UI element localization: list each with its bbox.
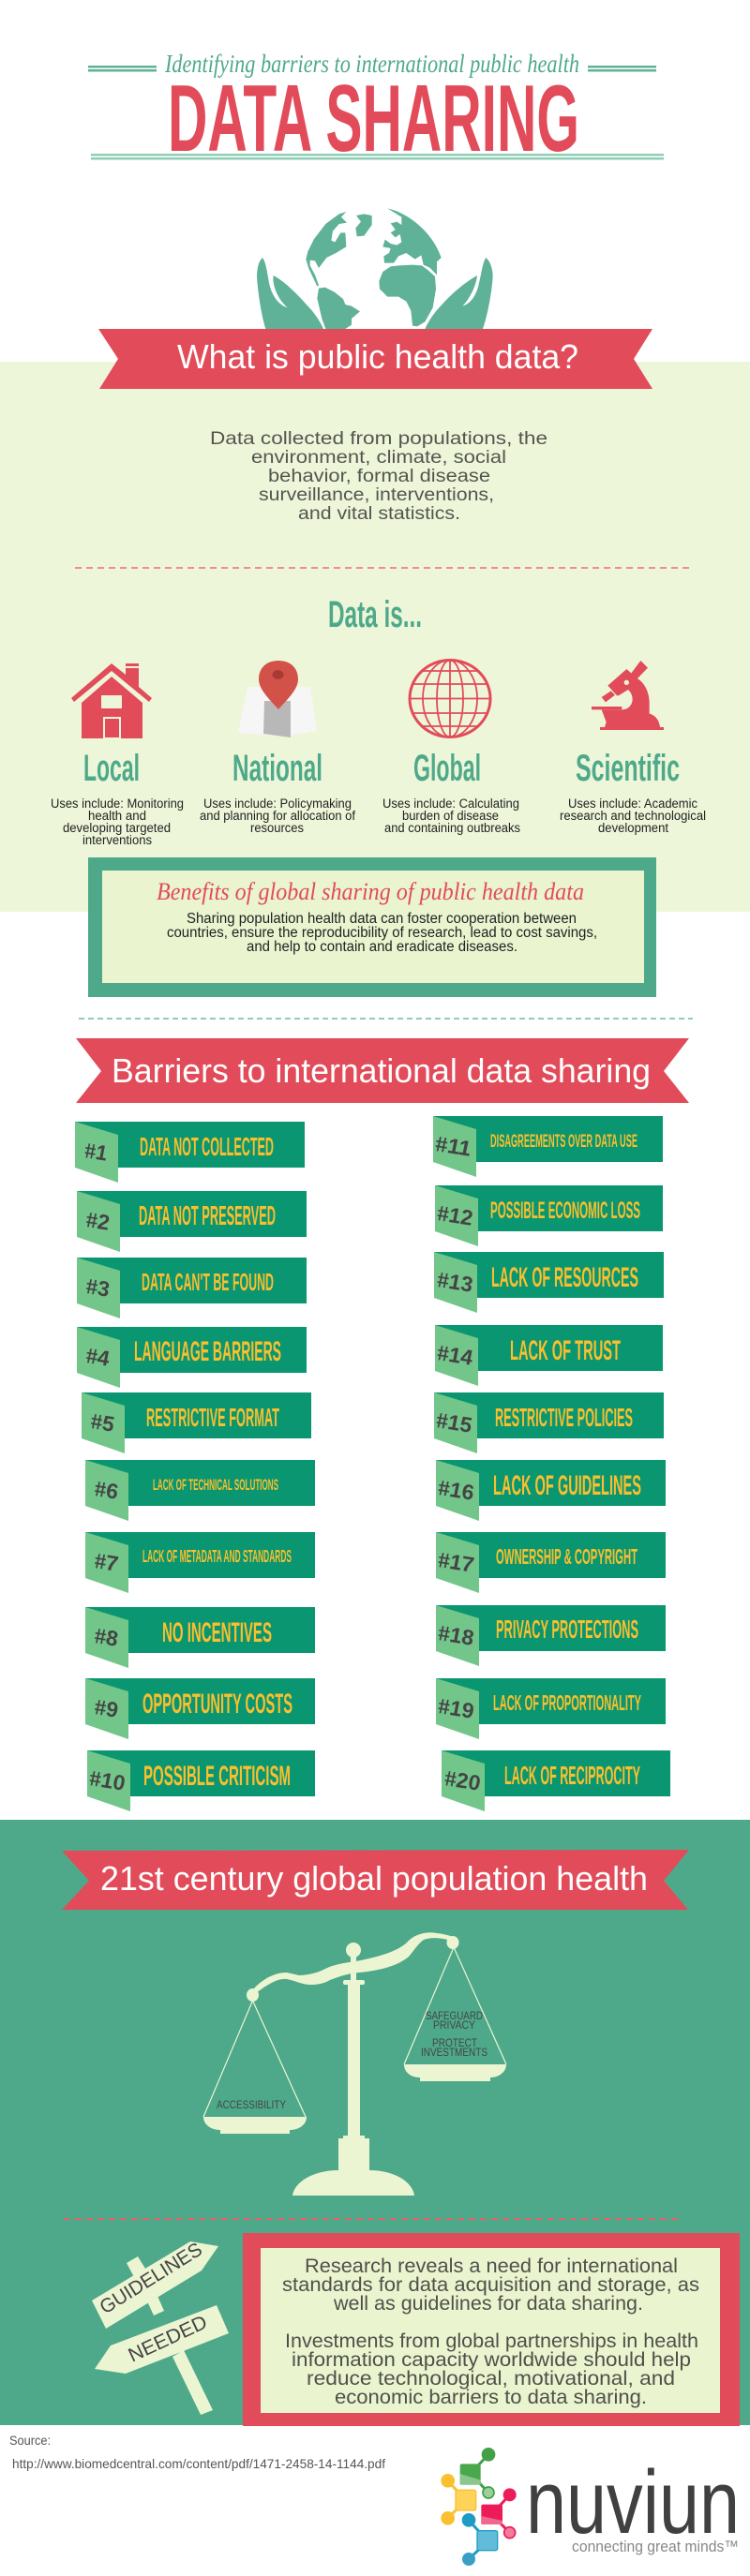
icon: signpost: GUIDELINES <box>96 2239 206 2318</box>
barrier 11 <box>433 1116 663 1177</box>
source <box>9 2433 385 2471</box>
benefits text: Sharing population health data can foster cooperation between <box>187 911 577 927</box>
description: and planning for allocation of <box>200 809 355 823</box>
source: Source: <box>9 2433 51 2448</box>
description: and containing outbreaks <box>384 821 520 835</box>
benefits heading: Benefits of global sharing of public health data <box>157 878 584 905</box>
barrier 9: #9 <box>94 1694 118 1722</box>
text block: definition: behavior, formal disease <box>268 467 490 486</box>
label: National <box>232 748 322 789</box>
source: http://www.biomedcentral.com/content/pdf/1471-2458-14-1144.pdf <box>12 2456 385 2471</box>
barrier 6: LACK OF TECHNICAL SOLUTIONS <box>153 1476 278 1494</box>
barrier 20: #20 <box>444 1765 480 1795</box>
barrier 17 <box>436 1532 666 1593</box>
barrier 16: #16 <box>438 1475 473 1505</box>
banner: what is public health data: What is public health data? <box>177 337 578 376</box>
logo tagline: connecting great minds™ <box>572 2538 739 2555</box>
banner: 21st century: 21st century global population health <box>100 1859 648 1898</box>
icon: house <box>71 663 152 738</box>
barrier 4: LANGUAGE BARRIERS <box>134 1336 281 1367</box>
text block: definition: surveillance, interventions, <box>259 485 494 505</box>
description: Uses include: Calculating <box>382 797 519 811</box>
description: interventions <box>82 833 152 847</box>
benefits text <box>167 911 597 955</box>
barrier 14: LACK OF TRUST <box>510 1335 621 1366</box>
barrier 6 <box>85 1460 315 1521</box>
column: global <box>382 660 520 835</box>
text block: definition: environment, climate, social <box>251 448 506 468</box>
icon: balance scale <box>203 1932 506 2196</box>
findings text <box>282 2256 699 2408</box>
column: local <box>51 663 184 847</box>
barrier 18 <box>436 1605 666 1666</box>
text block: definition <box>210 429 548 524</box>
barrier 2: DATA NOT PRESERVED <box>139 1201 276 1231</box>
icon: signpost <box>92 2239 229 2415</box>
subtitle: Identifying barriers to international public health <box>164 50 579 78</box>
banner: 21st century <box>62 1850 689 1910</box>
barrier 3: DATA CAN'T BE FOUND <box>142 1268 274 1296</box>
findings text: reduce technological, motivational, and <box>307 2368 675 2390</box>
barrier 12 <box>435 1185 663 1246</box>
barrier 2: #2 <box>85 1207 110 1235</box>
barrier 12: #12 <box>437 1200 472 1230</box>
barrier 13: #13 <box>437 1267 472 1297</box>
description: burden of disease <box>402 809 499 823</box>
description <box>560 797 706 835</box>
icon: signpost: NEEDED <box>125 2312 211 2367</box>
scale label: privacy and investments: PRIVACY <box>433 2018 475 2032</box>
barrier 19: #19 <box>438 1693 473 1723</box>
panel: research findings <box>243 2233 740 2426</box>
header title block <box>88 50 664 171</box>
description: Uses include: Monitoring <box>51 797 184 811</box>
findings text: economic barriers to data sharing. <box>335 2387 647 2408</box>
description: research and technological <box>560 809 706 823</box>
barrier 10: POSSIBLE CRITICISM <box>143 1761 291 1792</box>
label: Global <box>413 748 481 789</box>
benefits text: and help to contain and eradicate diseases. <box>247 939 518 955</box>
description <box>382 797 520 835</box>
heading: data is: Data is... <box>328 594 422 635</box>
label: Local <box>83 748 140 789</box>
column: scientific <box>560 661 706 835</box>
column: national <box>200 661 355 835</box>
barrier 3 <box>77 1258 307 1318</box>
findings text: standards for data acquisition and storage, as <box>282 2274 699 2296</box>
barrier 11: #11 <box>435 1131 471 1161</box>
description: resources <box>250 821 304 835</box>
findings text: information capacity worldwide should help <box>292 2349 691 2371</box>
barrier 10: #10 <box>89 1765 125 1795</box>
description: health and <box>88 809 146 823</box>
barrier 10 <box>87 1750 315 1811</box>
barrier 1 <box>75 1122 305 1183</box>
scale label: privacy and investments: PROTECT <box>432 2036 478 2049</box>
icon: globe in hands <box>257 208 493 329</box>
icon: map pin <box>238 661 317 737</box>
description: developing targeted <box>63 821 171 835</box>
barrier 16 <box>436 1460 666 1521</box>
scale label: privacy and investments: INVESTMENTS <box>421 2046 488 2059</box>
barrier 6: #6 <box>94 1476 118 1504</box>
text block: definition: and vital statistics. <box>298 504 460 524</box>
banner: what is public health data <box>98 329 652 389</box>
banner: barriers <box>76 1038 689 1103</box>
icon: globe <box>410 660 490 737</box>
barrier 5: #5 <box>90 1408 115 1437</box>
barrier 9: OPPORTUNITY COSTS <box>142 1689 292 1720</box>
logo mark <box>441 2448 517 2566</box>
barrier 20 <box>442 1750 670 1811</box>
description: development <box>598 821 668 835</box>
logo: nuviun <box>441 2448 740 2566</box>
description <box>51 797 184 847</box>
barrier 3: #3 <box>85 1273 110 1302</box>
label: Scientific <box>576 748 680 789</box>
panel: benefits <box>88 857 656 997</box>
barrier 1: #1 <box>84 1138 107 1166</box>
findings text: well as guidelines for data sharing. <box>333 2293 643 2315</box>
barrier 8: NO INCENTIVES <box>162 1617 272 1648</box>
text block: definition: Data collected from populations, the <box>210 429 548 449</box>
barrier 14 <box>435 1325 663 1386</box>
findings text: Investments from global partnerships in health <box>285 2330 698 2352</box>
barrier 15 <box>434 1392 664 1453</box>
barrier 4 <box>77 1327 307 1388</box>
barrier 19 <box>436 1678 666 1739</box>
barrier 8 <box>85 1607 315 1668</box>
description: Uses include: Academic <box>568 797 698 811</box>
barrier 5: RESTRICTIVE FORMAT <box>146 1403 279 1432</box>
icon: microscope <box>592 661 664 730</box>
scale label: accessibility: ACCESSIBILITY <box>217 2098 286 2111</box>
banner: barriers: Barriers to international data sharing <box>112 1051 651 1090</box>
barrier 2 <box>77 1191 307 1252</box>
benefits text: countries, ensure the reproducibility of research, lead to cost savings, <box>167 925 597 941</box>
barrier 7 <box>85 1532 315 1593</box>
barrier 17: #17 <box>438 1547 474 1577</box>
description <box>200 797 355 835</box>
description: Uses include: Policymaking <box>203 797 352 811</box>
barrier 15: #15 <box>436 1407 472 1437</box>
barrier 14: #14 <box>437 1340 472 1370</box>
barrier 7: #7 <box>94 1548 119 1576</box>
barrier 18: #18 <box>438 1620 473 1650</box>
barrier 5 <box>82 1392 311 1453</box>
findings text: Research reveals a need for international <box>305 2256 678 2277</box>
barrier 1: DATA NOT COLLECTED <box>140 1132 274 1161</box>
barrier 13 <box>434 1252 664 1313</box>
barrier 4: #4 <box>85 1343 110 1371</box>
barrier 8: #8 <box>94 1623 118 1651</box>
scale label: privacy and investments <box>421 2009 488 2059</box>
scale label: privacy and investments: SAFEGUARD <box>426 2009 483 2022</box>
barrier 7: LACK OF METADATA AND STANDARDS <box>142 1547 292 1566</box>
barrier 9 <box>85 1678 315 1739</box>
